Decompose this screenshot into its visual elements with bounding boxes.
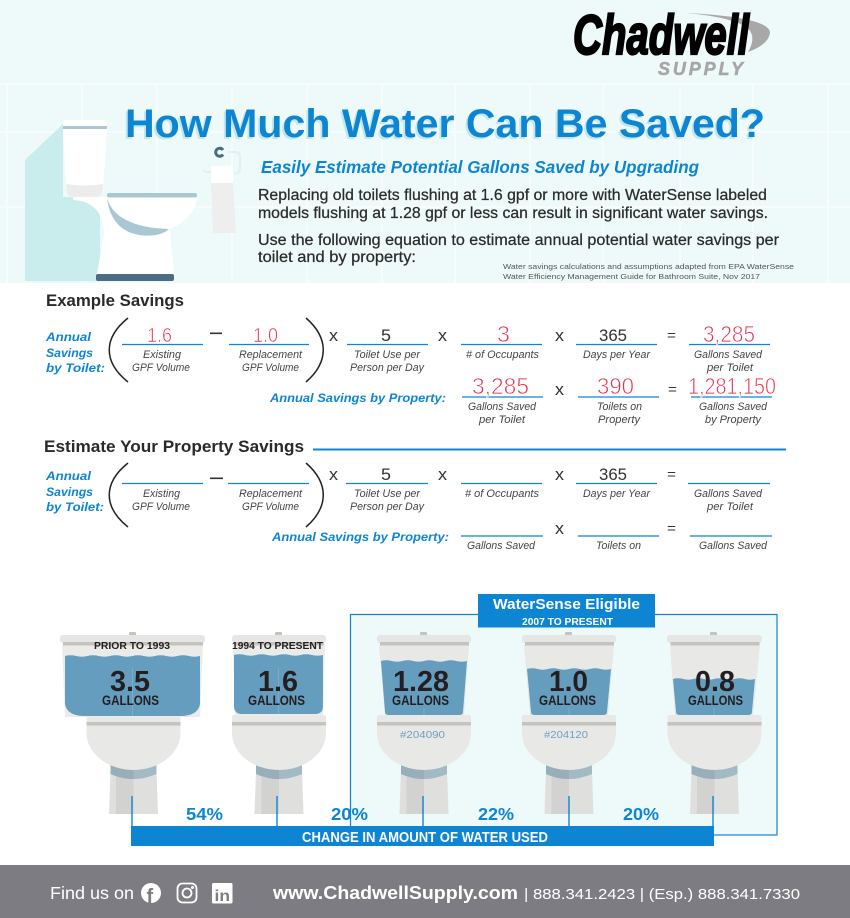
percentages: 20% <box>331 804 368 824</box>
percentages: 54% <box>186 804 223 824</box>
toilet: 1.0 gallons #204120: #204120 <box>544 729 588 741</box>
equation: blank savings by property (cropped): Gallons Saved <box>699 540 768 552</box>
logo: Chadwell Supply <box>573 3 770 79</box>
equation: blank savings by toilet: per Toilet <box>706 501 754 513</box>
toilet: prior to 1993, 3.5 gallons: PRIOR TO 1993 <box>94 640 170 652</box>
equation: blank savings by property (cropped) <box>461 525 772 549</box>
logo: Chadwell Supply: SUPPLY <box>658 59 745 79</box>
subheading: 2007 to present: 2007 TO PRESENT <box>522 616 614 628</box>
toilet: prior to 1993, 3.5 gallons: 3.5 <box>110 666 150 698</box>
equation: savings by property: 3,285 <box>472 373 529 399</box>
bar: change in amount of water used: CHANGE IN AMOUNT OF WATER USED <box>302 830 548 846</box>
equation: savings by toilet: # of Occupants <box>466 349 539 361</box>
equation: savings by property: = <box>668 381 677 397</box>
toilet: 1.28 gallons #204090: 1.28 <box>393 666 449 698</box>
logo: Chadwell Supply: Chadwell <box>573 3 750 66</box>
icon: linkedin: in <box>214 888 230 905</box>
icon: linkedin <box>212 883 232 905</box>
equation: blank savings by toilet: Existing <box>143 488 181 500</box>
percentage change bracket <box>131 796 714 846</box>
equation: savings by property: Gallons Saved <box>468 401 537 413</box>
equation: blank savings by toilet: Toilet Use per <box>354 488 421 500</box>
equation: savings by toilet <box>109 318 770 382</box>
toilet: 1.0 gallons #204120 <box>522 632 616 814</box>
source footnote <box>503 262 794 281</box>
equation: blank savings by property (cropped): Property <box>598 553 642 565</box>
intro text: Replacing old toilets flushing at 1.6 gpf or more with WaterSense labeled <box>258 187 767 204</box>
percentages: 20% <box>623 804 659 824</box>
equation: blank savings by toilet: Gallons Saved <box>694 488 763 500</box>
toilet: 1.28 gallons #204090: #204090 <box>400 729 445 741</box>
intro text: models flushing at 1.28 gpf or less can result in significant water savings. <box>258 205 768 222</box>
equation: savings by property: per Toilet <box>478 414 526 426</box>
equation: blank savings by toilet: 5 <box>381 465 391 484</box>
equation: blank savings by toilet <box>109 463 770 527</box>
equation: savings by toilet: Person per Day <box>350 362 425 374</box>
equation: blank savings by toilet: x <box>555 465 565 484</box>
equation: savings by toilet: 3,285 <box>703 321 755 347</box>
toilet: prior to 1993, 3.5 gallons: GALLONS <box>102 693 159 708</box>
toilet: 1.0 gallons #204120: 1.0 <box>549 666 588 698</box>
equation: savings by toilet: GPF Volume <box>132 362 190 374</box>
equation: savings by property: Property <box>598 414 642 426</box>
source footnote: Water savings calculations and assumptions adapted from EPA WaterSense <box>503 262 794 271</box>
illustration: toilet paper roll <box>203 148 240 233</box>
toilet: prior to 1993, 3.5 gallons <box>60 632 205 814</box>
equation: savings by toilet: 365 <box>599 326 627 345</box>
label: annual savings by property blank: Annual Savings by Property: <box>271 530 449 544</box>
equation: savings by toilet: x <box>329 326 339 345</box>
intro text <box>258 187 779 266</box>
equation: savings by property: 390 <box>597 373 634 399</box>
equation: savings by property: Gallons Saved <box>699 401 768 413</box>
illustration: toilet with shadow <box>25 120 197 281</box>
label: annual savings by toilet blank <box>45 469 104 514</box>
equation: savings by toilet: 1.6 <box>147 325 172 347</box>
equation: savings by toilet: 5 <box>381 326 391 345</box>
bar: change in amount of water used <box>131 826 714 846</box>
equation: savings by toilet: per Toilet <box>706 362 754 374</box>
percentages <box>186 804 659 824</box>
title: How Much Water Can Be Saved? <box>125 102 765 146</box>
heading: watersense eligible: WaterSense Eligible <box>493 596 640 613</box>
equation: blank savings by toilet: GPF Volume <box>132 501 190 513</box>
label: annual savings by toilet: Annual <box>45 330 92 344</box>
source footnote: Water Efficiency Management Guide for Bathroom Suite, Nov 2017 <box>503 272 760 281</box>
toilet: 1994 to present, 1.6 gallons: 1.6 <box>258 666 298 698</box>
phone numbers: | 888.341.2423 | (Esp.) 888.341.7330 <box>524 886 800 903</box>
toilet: 1.0 gallons #204120: GALLONS <box>539 693 596 708</box>
label: annual savings by toilet blank: Savings <box>46 485 93 499</box>
equation: savings by toilet: Existing <box>143 349 182 361</box>
label: annual savings by property: Annual Savings by Property: <box>269 391 446 405</box>
equation: savings by toilet: x <box>555 326 565 345</box>
heading: estimate your property savings: Estimate Your Property Savings <box>44 437 304 456</box>
panel: watersense eligible frame <box>350 594 777 835</box>
icon: instagram <box>178 884 196 902</box>
equation: savings by property: x <box>555 380 565 399</box>
toilet: 1.28 gallons #204090 <box>377 632 471 814</box>
label: annual savings by toilet blank: Annual <box>45 469 92 483</box>
toilet: 1994 to present, 1.6 gallons: 1994 TO PRESENT <box>232 640 324 652</box>
equation: savings by toilet: x <box>438 326 448 345</box>
equation: blank savings by property (cropped): Toilets on <box>596 540 641 552</box>
equation: blank savings by property (cropped): Gallons Saved <box>467 540 536 552</box>
percentages: 22% <box>478 804 514 824</box>
equation: savings by property: Toilets on <box>597 401 642 413</box>
equation: savings by property <box>462 373 776 426</box>
equation: blank savings by toilet: = <box>667 466 676 482</box>
equation: savings by toilet: Gallons Saved <box>694 349 763 361</box>
equation: blank savings by property (cropped): = <box>667 520 676 536</box>
equation: savings by property: 1,281,150 <box>688 373 776 399</box>
intro text: toilet and by property: <box>258 249 416 266</box>
toilet: 1.28 gallons #204090: GALLONS <box>392 693 449 708</box>
subtitle: Easily Estimate Potential Gallons Saved by Upgrading <box>261 157 699 177</box>
toilet: 1994 to present, 1.6 gallons <box>232 632 326 814</box>
equation: blank savings by toilet: x <box>329 465 339 484</box>
find us on: Find us on <box>50 883 134 903</box>
equation: savings by toilet: Toilet Use per <box>354 349 421 361</box>
toilet: 0.8 gallons <box>667 632 762 814</box>
equation: blank savings by toilet: # of Occupants <box>465 488 539 500</box>
equation: blank savings by property (cropped): x <box>555 519 565 538</box>
label: annual savings by toilet <box>45 330 105 375</box>
icon: facebook: f <box>146 886 154 908</box>
website: www.ChadwellSupply.com <box>272 883 518 903</box>
toilet: 1994 to present, 1.6 gallons: GALLONS <box>248 693 305 708</box>
panel: estimate your property savings <box>45 440 786 549</box>
icon: facebook <box>141 883 161 908</box>
equation: blank savings by toilet: x <box>438 465 448 484</box>
equation: savings by toilet: 3 <box>497 321 510 347</box>
intro text: Use the following equation to estimate annual potential water savings per <box>258 232 779 249</box>
equation: savings by toilet: Replacement <box>239 349 303 361</box>
equation: blank savings by toilet: Days per Year <box>583 488 651 500</box>
equation: savings by toilet: 1.0 <box>253 325 278 347</box>
equation: savings by toilet: Days per Year <box>583 349 651 361</box>
equation: savings by toilet: GPF Volume <box>242 362 299 374</box>
equation: blank savings by toilet: 365 <box>599 465 627 484</box>
footer <box>0 865 850 918</box>
equation: blank savings by toilet: Replacement <box>239 488 303 500</box>
equation: blank savings by property (cropped): per Toilet <box>477 553 525 565</box>
label: annual savings by toilet: Savings <box>46 346 93 360</box>
toilet: 0.8 gallons: 0.8 <box>695 666 735 698</box>
heading: example savings: Example Savings <box>46 291 184 310</box>
header panel <box>0 0 850 283</box>
equation: blank savings by toilet: GPF Volume <box>242 501 299 513</box>
panel: example savings <box>45 291 776 426</box>
label: annual savings by toilet blank: by Toilet: <box>46 500 104 514</box>
toilet: 0.8 gallons: GALLONS <box>688 693 743 708</box>
equation: savings by toilet: = <box>667 327 676 343</box>
label: annual savings by toilet: by Toilet: <box>46 361 105 375</box>
equation: blank savings by toilet: Person per Day <box>350 501 425 513</box>
equation: savings by property: by Property <box>705 414 762 426</box>
